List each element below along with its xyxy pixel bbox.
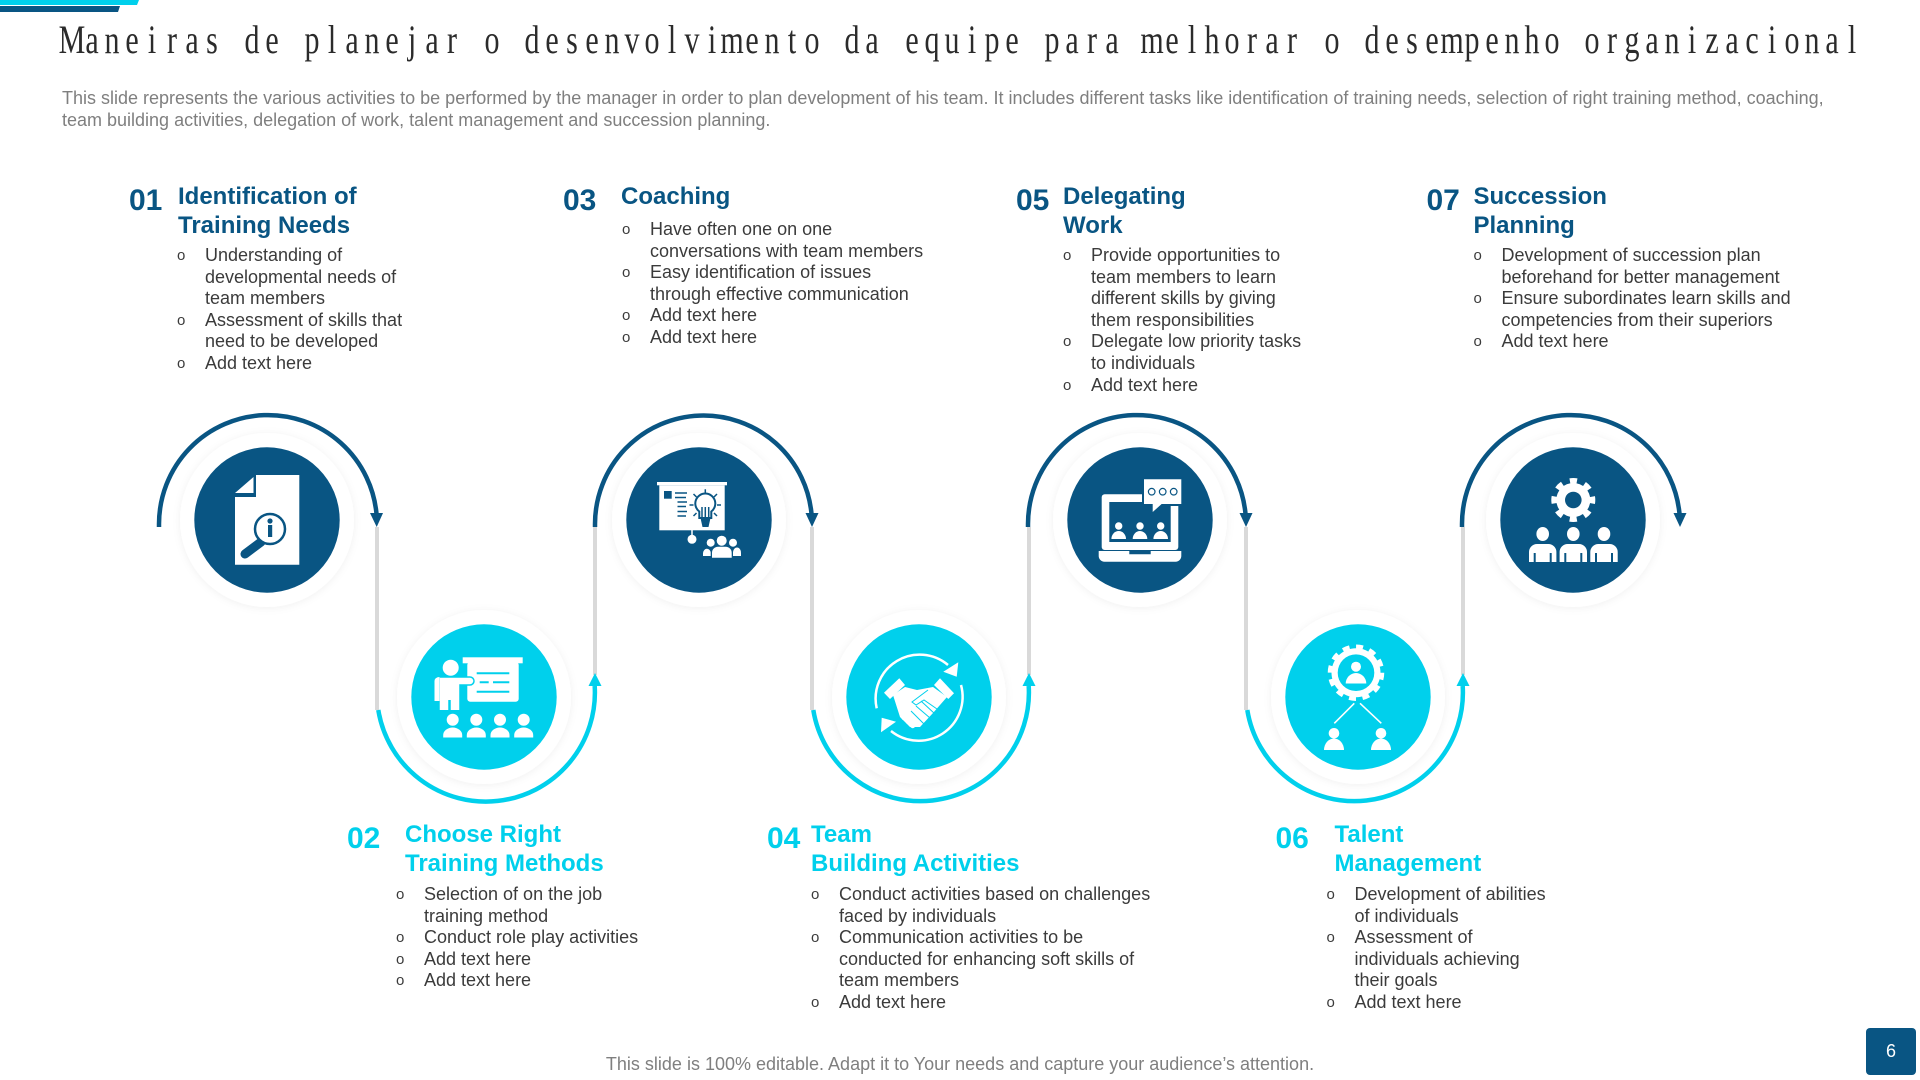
panel: step 07: Planning [1474, 212, 1575, 238]
panel: step 02: Add text here [424, 970, 531, 990]
panel: step 07: o [1474, 333, 1482, 350]
panel: step 02: o [396, 929, 404, 946]
panel: step 01: need to be developed [205, 331, 378, 351]
arrow: arc 5 [1028, 415, 1252, 527]
icon: laptop with group and speech bubble [1053, 433, 1227, 607]
panel: step 04: o [811, 886, 819, 903]
top accent bars [0, 0, 139, 12]
icon: gear with talent hierarchy [1271, 610, 1445, 784]
description text [62, 88, 1824, 130]
panel: step 04: team members [839, 970, 959, 990]
panel: step 01: team members [205, 288, 325, 308]
arrow: arc 7 [1462, 415, 1686, 527]
arrow: arc 6 [1247, 673, 1470, 801]
panel: step 03: Easy identification of issues [650, 262, 871, 282]
panel: step 07: Ensure subordinates learn skills and [1502, 288, 1791, 308]
icon: document with magnifier [180, 433, 354, 607]
arrow: arc 1 [159, 415, 383, 527]
panel: step 03: conversations with team members [650, 241, 923, 261]
panel: step 02: Conduct role play activities [424, 927, 638, 947]
panel: step 06: 06 [1276, 822, 1309, 855]
panel: step 03: Coaching [621, 183, 730, 210]
page number: 6 [1886, 1041, 1896, 1061]
panel: step 02: Training Methods [405, 850, 604, 876]
panel: step 05: them responsibilities [1091, 310, 1254, 330]
panel: step 06: Management [1334, 850, 1481, 876]
panel: step 07: o [1474, 290, 1482, 307]
panel: step 02: o [396, 886, 404, 903]
panel: step 06: their goals [1354, 970, 1438, 990]
panel: step 01: o [177, 312, 185, 329]
icon: handshake with cycle arrows [832, 610, 1006, 784]
panel: step 03: Have often one on one [650, 219, 832, 239]
panel: step 05: different skills by giving [1091, 288, 1276, 308]
icon: trainer presenting to audience [397, 610, 571, 784]
panel: step 07: Add text here [1502, 331, 1609, 351]
panel: step 05: o [1063, 377, 1071, 394]
arrow: arc 3 [595, 416, 818, 527]
panel: step 02: o [396, 951, 404, 968]
panel: step 05: 05 [1016, 184, 1049, 217]
page number [1866, 1028, 1916, 1075]
panel: step 05: o [1063, 333, 1071, 350]
panel: step 06: Development of abilities [1354, 884, 1546, 904]
panel: step 04: conducted for enhancing soft skills of [839, 949, 1134, 969]
icon: presentation board with bulb [612, 433, 786, 607]
panel: step 05: Delegate low priority tasks [1091, 331, 1301, 351]
panel: step 02 [347, 821, 638, 990]
panel: step 07: competencies from their superiors [1502, 310, 1773, 330]
panel: step 03: Add text here [650, 327, 757, 347]
panel: step 01: Training Needs [178, 212, 350, 238]
description text: team building activities, delegation of work, talent management and succession planning. [62, 110, 770, 130]
description text: This slide represents the various activities to be performed by the manager in order to plan development of his team. It includes different tasks like identification of training needs, selection of right training method, coaching, [62, 88, 1824, 108]
panel: step 03: o [622, 329, 630, 346]
panel: step 07: o [1474, 247, 1482, 264]
arrow: arc 2 [378, 673, 602, 802]
panel: step 07 [1426, 183, 1791, 351]
panel: step 03 [563, 183, 923, 347]
panel: step 01: o [177, 247, 185, 264]
panel: step 01: Understanding of [205, 245, 342, 265]
panel: step 02: 02 [347, 822, 380, 855]
title: Maneiras de planejar o desenvolvimento da equipe para melhorar o desempenho organizacional [59, 17, 1856, 62]
panel: step 01: Add text here [205, 353, 312, 373]
panel: step 03: o [622, 264, 630, 281]
arrow: arc 4 [813, 673, 1036, 801]
panel: step 02: Choose Right [405, 821, 561, 848]
panel: step 04: Add text here [839, 992, 946, 1012]
panel: step 06: Add text here [1354, 992, 1462, 1012]
panel: step 04: Team [811, 821, 872, 848]
panel: step 02: Selection of on the job [424, 884, 602, 904]
panel: step 06: individuals achieving [1354, 949, 1520, 969]
panel: step 01: developmental needs of [205, 267, 396, 287]
panel: step 05: Add text here [1091, 375, 1198, 395]
panel: step 04 [767, 821, 1150, 1012]
panel: step 04: Communication activities to be [839, 927, 1083, 947]
panel: step 04: faced by individuals [839, 906, 996, 926]
panel: step 06: of individuals [1354, 906, 1459, 926]
panel: step 03: through effective communication [650, 284, 909, 304]
panel: step 07: Succession [1474, 183, 1607, 210]
icon: gear with team [1486, 433, 1660, 607]
panel: step 07: beforehand for better management [1502, 267, 1780, 287]
panel: step 05: to individuals [1091, 353, 1195, 373]
panel: step 04: Conduct activities based on challenges [839, 884, 1150, 904]
panel: step 05: Delegating [1063, 183, 1186, 210]
panel: step 06: Assessment of [1354, 927, 1473, 947]
panel: step 02: Add text here [424, 949, 531, 969]
panel: step 02: o [396, 972, 404, 989]
panel: step 01: 01 [129, 184, 162, 217]
panel: step 06 [1276, 821, 1546, 1012]
panel: step 05: team members to learn [1091, 267, 1276, 287]
panel: step 06: o [1326, 994, 1335, 1011]
panel: step 05: Provide opportunities to [1091, 245, 1280, 265]
panel: step 05: o [1063, 247, 1071, 264]
panel: step 05 [1016, 183, 1301, 395]
panel: step 01: Assessment of skills that [205, 310, 402, 330]
panel: step 05: Work [1063, 212, 1123, 238]
footer note: This slide is 100% editable. Adapt it to Your needs and capture your audience’s attention. [606, 1054, 1314, 1074]
panel: step 01: Identification of [178, 183, 357, 210]
connector lines [377, 527, 1463, 710]
panel: step 03: o [622, 307, 630, 324]
panel: step 01: o [177, 355, 185, 372]
panel: step 04: o [811, 929, 819, 946]
panel: step 03: o [622, 221, 630, 238]
panel: step 06: Talent [1334, 821, 1403, 848]
panel: step 04: 04 [767, 822, 800, 855]
panel: step 04: o [811, 994, 819, 1011]
panel: step 01 [129, 183, 402, 373]
panel: step 06: o [1326, 929, 1335, 946]
panel: step 02: training method [424, 906, 548, 926]
panel: step 03: Add text here [650, 305, 757, 325]
panel: step 06: o [1326, 886, 1335, 903]
panel: step 04: Building Activities [811, 850, 1019, 876]
panel: step 07: 07 [1426, 184, 1460, 217]
panel: step 03: 03 [563, 184, 596, 217]
panel: step 07: Development of succession plan [1502, 245, 1761, 265]
